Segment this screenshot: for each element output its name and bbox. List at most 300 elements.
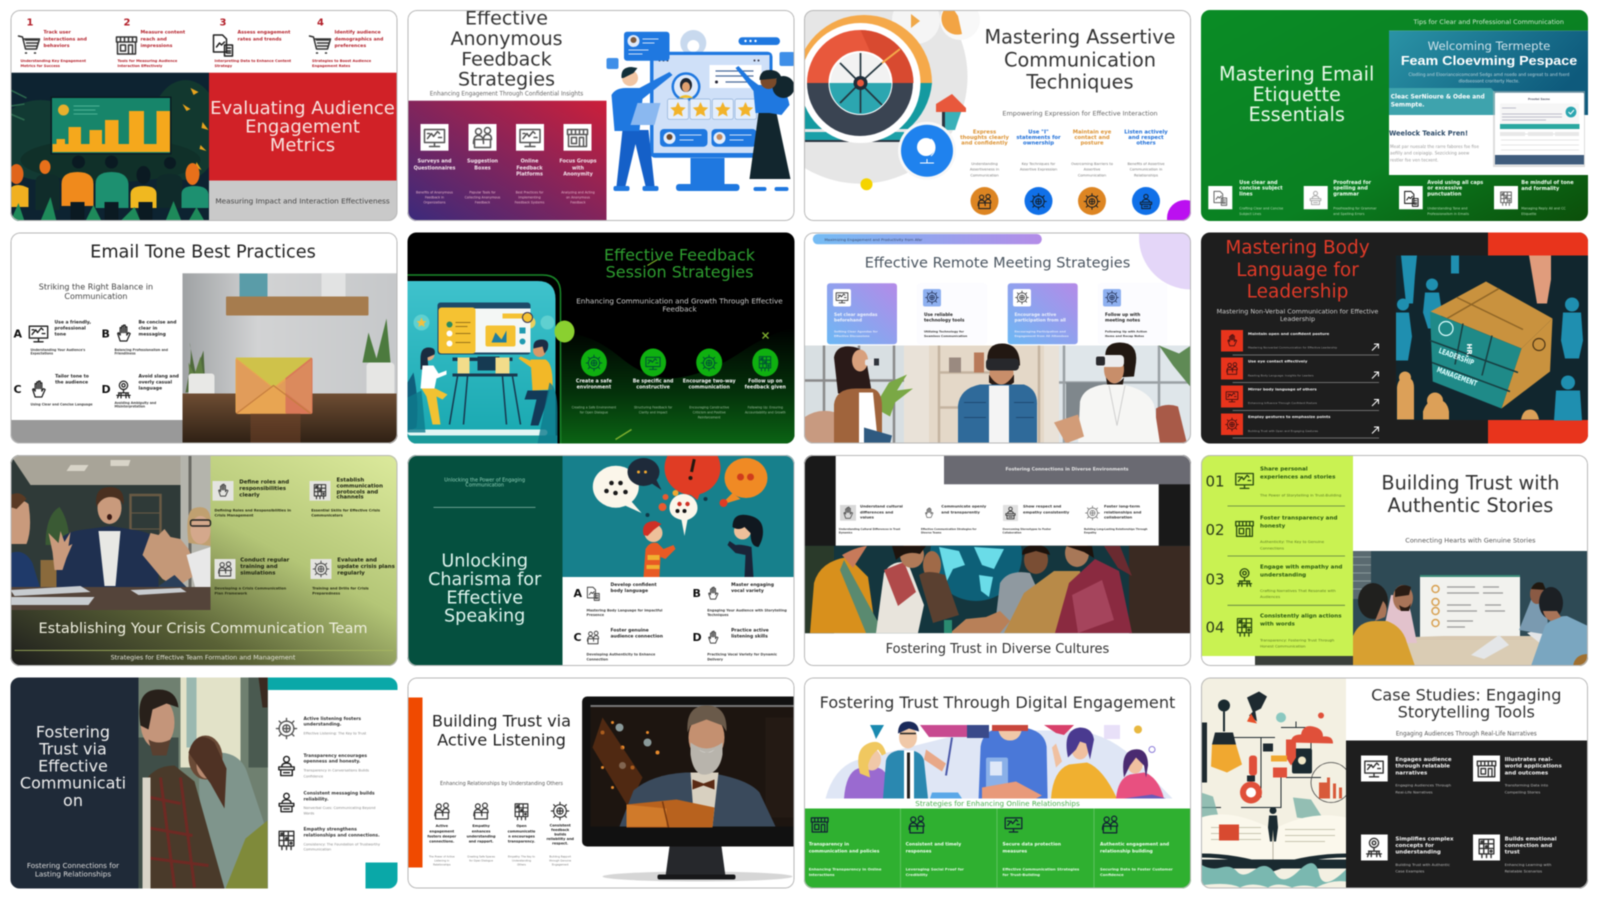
numbered metrics row [18, 18, 383, 68]
listening items: Listening in [434, 858, 450, 862]
strategy cards: Items and Recap Notes [1105, 334, 1144, 338]
subtitle: Engaging Audiences Through Real-Life Narratives [1396, 732, 1537, 738]
listening items: n encourages [508, 834, 535, 838]
title: Fostering Trust Through Digital Engagement [820, 693, 1175, 712]
listening items: Empathy [472, 824, 490, 828]
numbered list panel: understanding [1260, 572, 1306, 578]
left title panel [408, 455, 562, 666]
email tips row: Use clear and [1239, 180, 1278, 186]
strategy cards: Follow up with [1105, 312, 1140, 318]
numbered metrics row: rates and trends [238, 36, 282, 42]
title: Leadership [1247, 281, 1348, 302]
listening items: Creating Safe Spaces [467, 854, 496, 858]
technique list: Mastering Nonverbal Communication for Effective Leadership [1248, 346, 1337, 350]
numbered metrics row: Engagement Rates [312, 64, 350, 68]
subtitle: Enhancing Communication and Growth Through Effective [576, 296, 783, 305]
left title panel [10, 678, 138, 888]
trust items: understanding. [304, 721, 342, 727]
tone tips A B C D: D [102, 383, 111, 396]
feedback methods panel: Boxes [474, 165, 491, 171]
numbered metrics row: Measure content [140, 29, 186, 35]
email tips row: Understanding Tone and [1427, 206, 1467, 210]
title: Building Trust via [432, 711, 571, 730]
dark benefits panel: Enhancing Learning with [1505, 862, 1552, 866]
listening items: for Open Dialogue [469, 858, 493, 862]
title: Establishing Your Crisis Communication Team [39, 621, 367, 637]
culture items: Dynamics [839, 530, 853, 534]
strategies row: measures [1002, 848, 1027, 854]
numbered list panel: Authenticity: The Key to Genuine [1260, 538, 1325, 544]
numbered list panel: Consistently align actions [1260, 614, 1342, 620]
strategy cards: participation from all [1014, 317, 1066, 323]
tone tips A B C D: messaging [138, 331, 166, 337]
feedback methods panel: Questionnaires [414, 165, 455, 171]
trust items: reliability. [304, 796, 329, 802]
listening items: engagement [429, 830, 455, 834]
trust items: Words [304, 812, 314, 816]
listening items: The Power of Active [429, 854, 455, 858]
numbered metrics row: reach and [140, 36, 167, 42]
screenshot: email template preview [1389, 31, 1588, 175]
listening items: fosters deeper [427, 834, 457, 838]
top tagline: Tips for Clear and Professional Communication [1412, 18, 1564, 26]
photo: envelope on desk [182, 273, 398, 444]
numbered metrics row: preferences [334, 42, 366, 48]
screenshot: email template preview: Prootei Sacne [1528, 97, 1550, 101]
feedback methods panel: Online [521, 159, 539, 165]
technique columns: posture [1080, 141, 1104, 147]
dark benefits panel: Simplifies complex [1395, 836, 1454, 842]
tone tips A B C D: overly casual [138, 379, 172, 385]
tone tips A B C D: A [14, 328, 22, 340]
culture items: Effective Communication Strategies for [921, 526, 977, 530]
strategy cards: Setting Clear Agendas for [834, 330, 878, 334]
tips A B C D: Practicing Vocal Variety for Dynamic [707, 652, 777, 656]
technique columns: Overcoming Barriers to [1071, 162, 1113, 166]
technique list: Mirror body language of others [1248, 386, 1317, 392]
technique columns: Maintain eye [1073, 129, 1112, 135]
title: Session Strategies [606, 262, 753, 281]
illustration: audience watching bar chart [0, 73, 220, 221]
panel: Fostering Trust Through Digital Engagement [804, 678, 1191, 888]
technique columns: and confidently [961, 141, 1008, 147]
screenshot: email template preview: Weelock Teaick Pren! [1389, 130, 1468, 138]
title: Effective Remote Meeting Strategies [865, 255, 1130, 271]
strategy cards: Effective Discussions [834, 334, 870, 338]
strategy steps: Create a safe [576, 378, 613, 384]
numbered metrics row: 4 [317, 18, 324, 28]
technique columns: Listen actively [1124, 129, 1168, 135]
title: Language for [1236, 260, 1359, 280]
email tips row [1208, 180, 1574, 216]
feedback methods panel: Implementing [518, 196, 541, 200]
numbered list panel: Engage with empathy and [1260, 565, 1342, 571]
title: Techniques [1025, 70, 1134, 93]
panel: Fostering Trust in Diverse Cultures [804, 455, 1191, 666]
trust items: Nonverbal Cues: Communicating Beyond [304, 806, 376, 810]
tone tips A B C D: language [138, 385, 162, 391]
trust items: Effective Listening: The Key to Trust [304, 732, 367, 736]
panel: Effective Anonymous Feedback Strategies [408, 7, 794, 221]
technique list: Maintain open and confident posture [1248, 331, 1330, 336]
tips A B C D: Master engaging [731, 582, 774, 588]
panel: Mastering Email Etiquette Essentials [1201, 10, 1588, 221]
title: Active Listening [437, 730, 566, 749]
strategies row: Secure data protection [1002, 841, 1061, 847]
title: Effective [465, 7, 548, 29]
crisis team items: regularly [337, 571, 365, 577]
strategies row: Confidence [1100, 872, 1124, 876]
crisis team items: training and [240, 564, 278, 570]
tone tips A B C D: Using Clear and Concise Language [30, 402, 93, 406]
panel: Establishing Your Crisis Communication Team [10, 455, 398, 666]
photo: man and woman in conversation [138, 678, 268, 888]
trust items: openness and honesty. [304, 758, 361, 764]
photo: team at whiteboard [1353, 551, 1588, 666]
photo: leadership cube: MANAGEMENT [1435, 365, 1479, 389]
dark benefits panel: Engages audience [1395, 757, 1452, 763]
title block: Engagement [245, 116, 360, 137]
feedback methods panel [408, 101, 606, 221]
crisis team items: Define roles and [239, 479, 289, 485]
feedback methods panel: Feedback [516, 165, 543, 171]
strategy cards: Utilizing Technology for [924, 330, 964, 334]
email tips row: and formality [1521, 186, 1560, 192]
tips A B C D: Develop confident [610, 582, 657, 588]
photo: leadership cube: HR, [1465, 344, 1473, 358]
crisis team items: Establish [336, 478, 364, 484]
crisis team items: responsibilities [239, 486, 286, 492]
strategy cards: beforehand [834, 317, 862, 323]
left title panel: Unlocking [441, 552, 528, 572]
top pill tag [813, 234, 1042, 244]
tone tips A B C D: Balancing Professionalism and [114, 348, 168, 352]
feedback methods panel: Feedback [475, 200, 490, 204]
technique columns: Assertive Expression [1020, 168, 1057, 172]
strategies row: Enhancing Transparency in Online [809, 866, 882, 871]
listening items: Others [517, 862, 527, 866]
technique columns: contact and [1074, 135, 1110, 141]
culture items: Foster long-term [1104, 503, 1140, 508]
left title panel: Lasting Relationships [35, 869, 111, 878]
strategies row: Transparency in [809, 841, 849, 847]
technique columns: Relationships [1134, 173, 1158, 177]
strategy steps: Encourage two-way [683, 378, 736, 384]
panel: Unlocking Charisma for Effective Speaking [408, 441, 794, 666]
tone tips A B C D: Be concise and [138, 319, 176, 325]
numbered metrics row: 1 [26, 18, 34, 28]
photo: diverse colleagues shaking hands [804, 509, 1191, 633]
strategies row: relationship building [1100, 848, 1153, 854]
strategy steps: communication [689, 384, 730, 390]
strategies row: Consistent and timely [906, 841, 961, 847]
email tips row: Managing Reply All and CC [1521, 206, 1566, 210]
crisis team items: Essential Skills for Effective Crisis [311, 508, 380, 512]
title: Authentic Stories [1388, 494, 1553, 516]
crisis team items: protocols and [336, 489, 378, 495]
tone tips A B C D: Avoiding Ambiguity and [114, 401, 156, 405]
dark benefits panel: concepts for [1395, 843, 1434, 849]
strategies row: Credibility [906, 872, 928, 876]
crisis team items: Evaluate and [337, 557, 377, 563]
culture items: Overcoming Stereotypes to Foster [1002, 526, 1052, 530]
illustration: gauge dial [804, 10, 1192, 222]
left title panel: on [63, 790, 83, 810]
panel: Mastering Assertive Communication Techniques [804, 10, 1192, 222]
tips A B C D: vocal variety [731, 588, 764, 594]
technique columns: statements for [1016, 135, 1061, 141]
panel: Effective Feedback Session Strategies [408, 232, 794, 444]
crisis team items [212, 478, 395, 595]
strategy steps: Clarity and Impact [639, 410, 668, 414]
tone tips A B C D: Use a friendly, [54, 319, 91, 325]
culture items [839, 503, 1148, 534]
illustration: man with gift on desktop monitor [582, 696, 804, 882]
feedback methods panel: Platforms [516, 171, 543, 177]
title: Communication [1004, 48, 1156, 71]
feedback methods panel: Popular Tools for [469, 191, 496, 195]
crisis team items: update crisis plans [337, 564, 395, 570]
dark benefits panel: through relatable [1395, 764, 1450, 770]
tips A B C D: B [692, 587, 701, 600]
dark benefits panel: world applications [1505, 764, 1562, 770]
title: Email Tone Best Practices [90, 242, 316, 262]
title: Effective Feedback [604, 245, 756, 264]
listening items: respect. [552, 842, 568, 846]
title: Mastering Assertive [984, 25, 1176, 48]
crisis team items: clearly [239, 493, 260, 499]
crisis team items: Developing a Crisis Communication [214, 586, 287, 590]
technique columns: Key Techniques for [1022, 162, 1056, 166]
title: Strategies [458, 68, 555, 90]
crisis team items: channels [336, 495, 364, 501]
subtitle: Leadership [1280, 315, 1315, 323]
trust items: Confidence [304, 774, 323, 778]
dark benefits panel: Transforming Data into [1504, 782, 1549, 787]
strategy steps: Accountability and Growth [745, 410, 786, 414]
numbered list panel: Honest Communication [1260, 643, 1306, 648]
feedback methods panel: Anonymity [563, 171, 594, 177]
dark benefits panel: and outcomes [1505, 770, 1549, 776]
dark benefits panel [1346, 740, 1588, 888]
left title panel: Trust via [38, 739, 107, 758]
subtitle: Empowering Expression for Effective Interaction [1002, 110, 1158, 118]
strategy cards [827, 283, 1168, 344]
technique list [1221, 330, 1379, 438]
numbered metrics row: Interpreting Data to Enhance Content [214, 59, 291, 63]
illustration: people with phone and megaphone [826, 722, 1172, 798]
crisis team items: Defining Roles and Responsibilities in [214, 508, 291, 512]
culture items: Empathy [1084, 530, 1097, 534]
technique list: Enhancing Influence Through Confident Posture [1248, 401, 1317, 405]
left title panel: Effective [446, 588, 523, 608]
email tips row: concise subject [1239, 186, 1283, 192]
feedback methods panel: Benefits of Anonymous [416, 191, 453, 195]
footer bar [10, 420, 182, 444]
culture items: relationships and [1104, 509, 1142, 514]
left title panel: Communication [465, 483, 504, 489]
strategy steps: Structuring Feedback for [634, 406, 673, 410]
tips A B C D: Mastering Body Language for Impactful [586, 608, 662, 612]
numbered metrics row: behaviors [44, 42, 70, 48]
subtitle band: Measuring Impact and Interaction Effectiveness [215, 196, 390, 206]
feedback methods panel: Organizations [423, 200, 446, 204]
listening items: communicatio [508, 830, 536, 834]
title: Feedback [461, 48, 552, 70]
tips A B C D: Delivery [707, 657, 724, 661]
illustration: tools over an open book [1201, 678, 1351, 888]
numbered metrics row: 2 [124, 18, 130, 28]
panel: Case Studies: Engaging Storytelling Tools [1201, 678, 1588, 888]
technique columns: Use "I" [1028, 129, 1049, 135]
email tips row: Crafting Clear and Concise [1239, 206, 1283, 210]
dark benefits panel: understanding [1395, 850, 1441, 856]
dark benefits panel: Building Trust with Authentic [1395, 862, 1450, 866]
technique columns: Benefits of Assertive [1127, 162, 1165, 166]
numbered metrics row: Metrics for Success [20, 64, 60, 68]
dark benefits panel: connection and [1505, 843, 1552, 849]
tone tips A B C D: B [102, 328, 110, 340]
technique columns: Assertiveness in [970, 168, 999, 172]
technique columns: Communication [970, 173, 999, 177]
numbered metrics row: impressions [140, 42, 173, 48]
title: Etiquette [1252, 82, 1341, 106]
tone tips A B C D: Tailor tone to [55, 373, 89, 379]
listening items [427, 802, 574, 866]
crisis team items: Plan Framework [214, 591, 248, 595]
panel: Building Trust via Active Listening [408, 678, 804, 888]
culture items: Understand cultural [860, 503, 903, 508]
feedback methods panel: Collecting Anonymous [465, 196, 501, 200]
header band [944, 455, 1191, 484]
technique columns: thoughts clearly [960, 135, 1009, 141]
listening items: Consistent [550, 824, 571, 828]
strategy cards: technology tools [924, 317, 965, 323]
dark benefits panel: Relatable Scenarios [1505, 868, 1542, 873]
numbered list panel [1201, 455, 1353, 666]
tone tips A B C D: Expectations [30, 352, 53, 356]
title block: Evaluating Audience [210, 98, 395, 118]
screenshot: email template preview: Semmpte. [1391, 102, 1424, 108]
left title panel: Unlocking the Power of Engaging [444, 477, 525, 483]
technique list: Use eye contact effectively [1248, 358, 1308, 364]
strategy cards: meeting notes [1105, 317, 1140, 323]
numbered list panel: The Power of Storytelling in Trust-Building [1259, 492, 1342, 498]
crisis team items: Preparedness [312, 591, 340, 595]
email tips row: Proofread for [1333, 180, 1372, 186]
email tips row: punctuation [1427, 191, 1462, 197]
culture items: Show respect and [1023, 503, 1062, 508]
numbered metrics row: interactions and [44, 36, 87, 42]
tone tips A B C D: clear in [138, 325, 157, 331]
numbered metrics row: Tools for Measuring Audience [118, 59, 178, 63]
tips A B C D: Connection [586, 657, 609, 661]
tone tips A B C D: tone [54, 331, 66, 337]
panel: Building Trust with Authentic Stories [1201, 455, 1588, 666]
strategy steps: Reinforcement [698, 416, 721, 420]
feedback methods panel: Feedback Systems [515, 200, 545, 204]
strategies row: Effective Communication Strategies [1002, 866, 1080, 871]
screenshot: email template preview: Clodling and Elooriancoicomcond Sedgs amd nsedo and segreat ts and fserd [1409, 72, 1570, 76]
technique columns: Communication in [1130, 168, 1162, 172]
numbered list panel: 04 [1206, 619, 1225, 637]
numbered list panel: Foster transparency and [1260, 515, 1337, 521]
email tips row: Be mindful of tone [1521, 180, 1574, 186]
technique columns: Understanding [971, 162, 998, 166]
numbered metrics row: Assess engagement [238, 29, 291, 35]
dark benefits panel: Real-Life Narratives [1395, 789, 1433, 794]
trust items: Consistent messaging builds [304, 790, 375, 796]
title: Building Trust with [1381, 471, 1559, 494]
subtitle: Strategies for Enhancing Online Relationships [915, 799, 1080, 808]
subtitle: Communication [64, 292, 127, 300]
feedback methods panel: with [572, 165, 585, 171]
title: Case Studies: Engaging [1371, 685, 1561, 704]
numbered list panel: experiences and stories [1260, 474, 1336, 480]
tips A B C D: audience connection [610, 633, 663, 639]
strategies row: responses [906, 848, 932, 854]
technique list: Reading Body Language: Insights for Leaders [1248, 374, 1314, 378]
email tips row: and Spelling Errors [1333, 212, 1365, 216]
numbered metrics row: Understanding Key Engagement [20, 59, 86, 63]
feedback methods panel: Feedback in [425, 196, 444, 200]
email tips row: Avoid using all caps [1427, 180, 1483, 186]
numbered list panel: 03 [1206, 570, 1225, 588]
listening items: understanding [467, 834, 496, 838]
listening items: enhances [472, 830, 490, 834]
listening items: and rapport. [469, 840, 494, 844]
numbered list panel: honesty [1260, 523, 1286, 529]
left title panel: Fostering [36, 722, 110, 741]
screenshot: email template preview: Cleac SerNioure & Odee and [1391, 94, 1485, 100]
screenshot: email template preview: Meat par nuesalz the rarre fabores fse fise [1390, 144, 1479, 148]
crisis team items: Training and Drills for Crisis [312, 586, 369, 590]
feedback methods panel: Analyzing and Acting [561, 191, 595, 195]
strategy cards: Seamless Communication [924, 334, 967, 338]
dark benefits panel: Compelling Stories [1505, 789, 1540, 794]
strategy steps: Creating a Safe Environment [572, 406, 617, 410]
listening items: Relationships [433, 862, 451, 866]
strategy steps: for Open Dialogue [580, 410, 608, 414]
culture items: values [860, 514, 875, 519]
top pill tag: Maximizing Engagement and Productivity from Afar [824, 237, 923, 242]
crisis team items: Crisis Management [214, 513, 254, 517]
illustration: people rating on monitor [606, 30, 794, 191]
numbered metrics row: Identify audience [334, 29, 381, 35]
numbered metrics row: Strategy [214, 64, 233, 68]
email tips row: grammar [1333, 191, 1360, 197]
tips A B C D: Engaging Your Audience with Storytelling [707, 608, 787, 612]
strategy cards: Following Up with Action [1105, 330, 1147, 334]
strategies row: Interactions [809, 872, 835, 876]
tips A B C D: D [692, 631, 702, 644]
listening items: Understanding [512, 858, 531, 862]
dark benefits panel: Illustrates real- [1505, 757, 1553, 763]
technique list: Employ gestures to emphasize points [1248, 414, 1331, 419]
dark benefits panel: Engaging Audiences Through [1395, 782, 1452, 787]
email tips row: lines [1239, 191, 1253, 197]
numbered list panel: Transparency: Fostering Trust Through [1259, 637, 1335, 642]
left title panel: Charisma for [428, 570, 542, 590]
trust items: Communication [304, 848, 331, 852]
panel: Fostering Trust via Effective Communication [10, 678, 398, 888]
technique list: Building Trust with Open and Engaging Gestures [1248, 429, 1318, 433]
numbered metrics row: 3 [220, 18, 226, 28]
crisis team items: Conduct regular [240, 557, 290, 563]
feedback methods panel: Best Practices for [516, 191, 544, 195]
left title panel: Effective [38, 756, 108, 775]
dark benefits panel: Case Examples [1395, 868, 1424, 873]
